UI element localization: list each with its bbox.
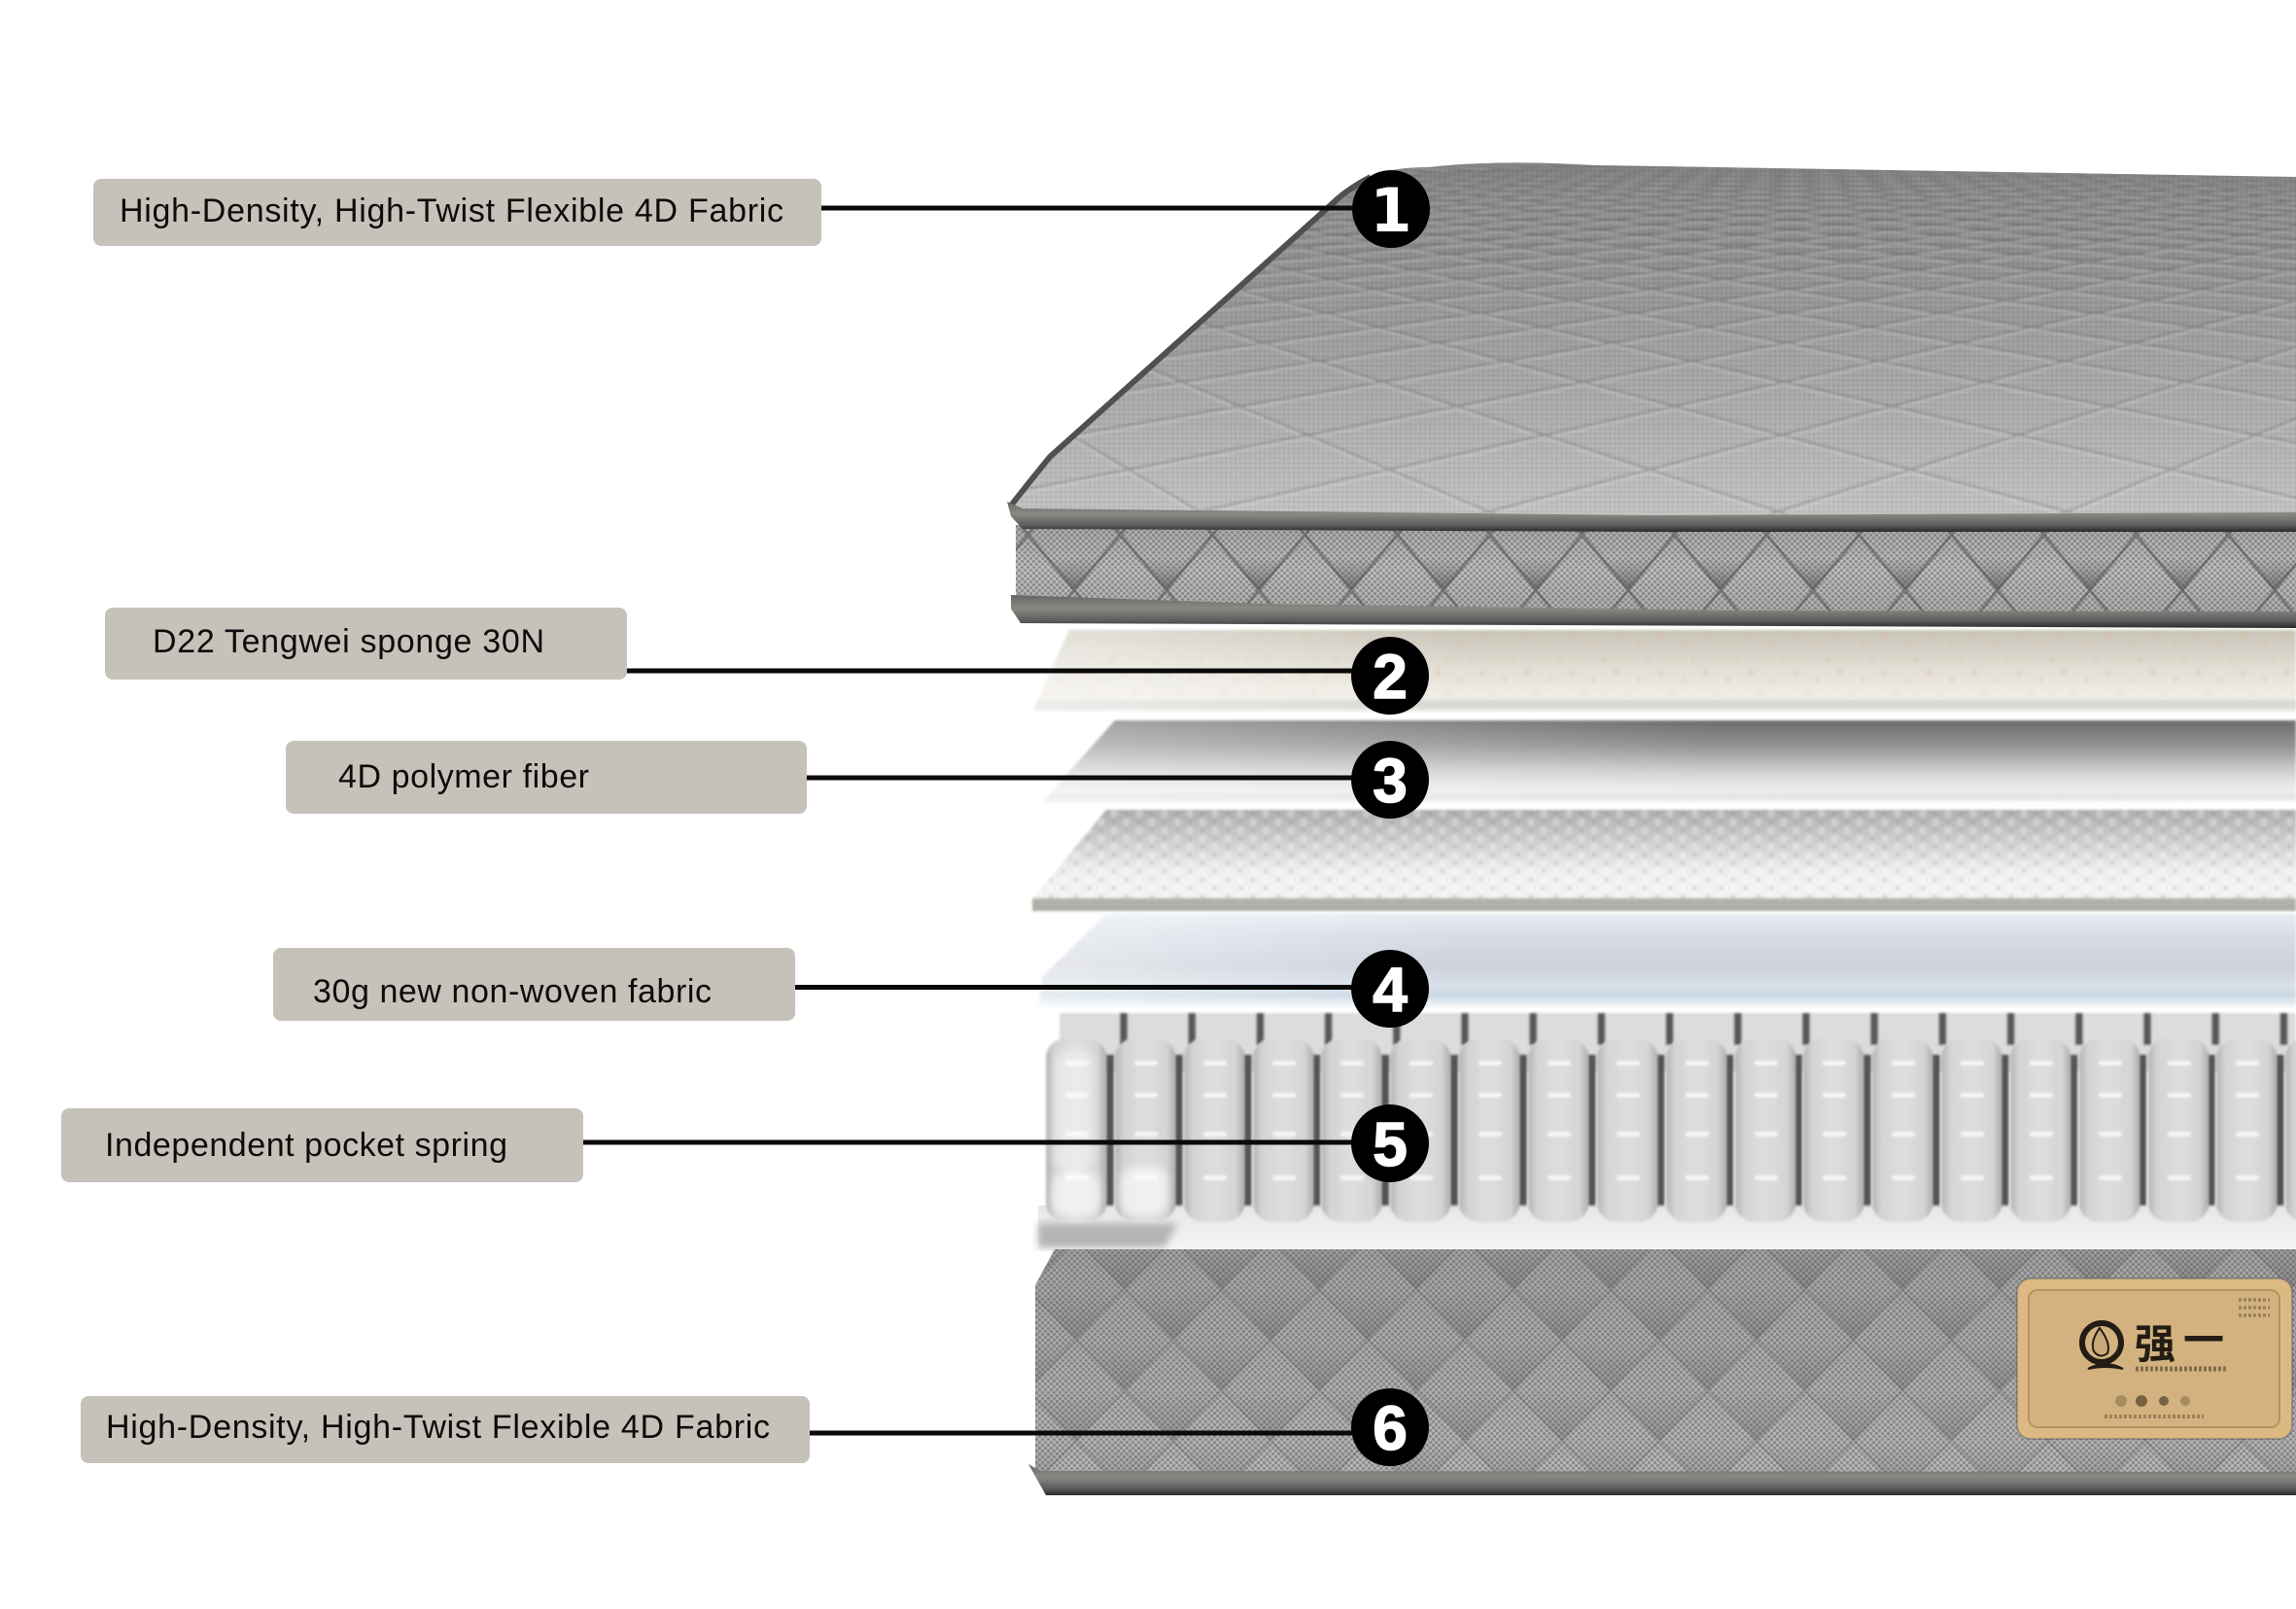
number badge 6 <box>1351 1388 1429 1466</box>
tiny print lines <box>2105 1300 2270 1417</box>
top quilted surface <box>1015 162 2296 515</box>
label 6 text: High-Density, High-Twist Flexible 4D Fabric <box>106 1409 770 1446</box>
leader line 4 <box>795 985 1356 990</box>
leader line 2 <box>627 669 1356 673</box>
number badge 3: 3 <box>1373 746 1408 816</box>
label 4 box <box>273 948 795 1021</box>
number badge 4 <box>1351 950 1429 1028</box>
brand label <box>2017 1278 2292 1439</box>
back row of springs <box>1060 1013 2296 1071</box>
layer 2: sponge <box>1032 630 2296 712</box>
mattress exploded view <box>803 162 2296 1495</box>
leader line 6 <box>810 1431 1356 1435</box>
callout 1 <box>93 170 1430 248</box>
callout 3 <box>286 741 1429 819</box>
layer 3b: dotted fiber sheet <box>1032 810 2296 911</box>
label 1 box <box>93 179 821 246</box>
label 4 text: 30g new non-woven fabric <box>313 973 712 1010</box>
number badge 6: 6 <box>1373 1393 1408 1463</box>
label 1 text: High-Density, High-Twist Flexible 4D Fabric <box>120 192 783 229</box>
callout 5 <box>61 1104 1429 1182</box>
number badge 2 <box>1351 637 1429 715</box>
gaps between front springs <box>1105 1055 2296 1206</box>
number badge 4: 4 <box>1373 955 1408 1025</box>
number badge 5 <box>1351 1104 1429 1182</box>
layer 6: bottom fabric cover <box>1028 1249 2296 1495</box>
lower piping <box>1011 595 2296 628</box>
quilted front panel <box>1035 1249 2296 1474</box>
icon: tiny certification marks <box>2115 1395 2190 1407</box>
brand name: 强 <box>2135 1321 2175 1367</box>
label 6 box <box>81 1396 810 1463</box>
bottom piping <box>1028 1464 2296 1495</box>
label 2 box <box>105 608 627 680</box>
layer 3: polymer fiber sheet <box>1043 720 2296 803</box>
bright corner springs <box>1052 1050 1168 1216</box>
base band under springs <box>1038 1206 2296 1250</box>
label 5 box <box>61 1108 583 1182</box>
label 5 text: Independent pocket spring <box>105 1127 507 1164</box>
leader line 5 <box>583 1139 1356 1145</box>
upper piping <box>1007 502 2296 532</box>
callout 6 <box>81 1388 1429 1466</box>
number badge 1: 1 <box>1370 175 1412 246</box>
layer 4: non-woven fabric <box>1039 914 2296 1007</box>
label 3 box <box>286 741 807 814</box>
leader line 3 <box>807 776 1356 780</box>
brand dash character: 一 <box>2183 1317 2224 1363</box>
number badge 2: 2 <box>1373 642 1408 712</box>
layer 1: top fabric cover <box>1007 162 2296 628</box>
leader line 1 <box>821 206 1356 210</box>
callout 4 <box>273 948 1429 1028</box>
label 2 text: D22 Tengwei sponge 30N <box>153 623 544 660</box>
side quilted band <box>1016 525 2296 614</box>
left piping edge <box>1011 177 1371 506</box>
number badge 5: 5 <box>1373 1109 1408 1179</box>
callout 2 <box>105 608 1429 715</box>
layer 5: pocket springs <box>1038 1013 2296 1250</box>
front row of springs <box>1046 1038 2296 1222</box>
number badge 1 <box>1352 170 1430 248</box>
number badge 3 <box>1351 741 1429 819</box>
icon: brand logo <box>2082 1323 2123 1369</box>
label 3 text: 4D polymer fiber <box>338 758 589 795</box>
